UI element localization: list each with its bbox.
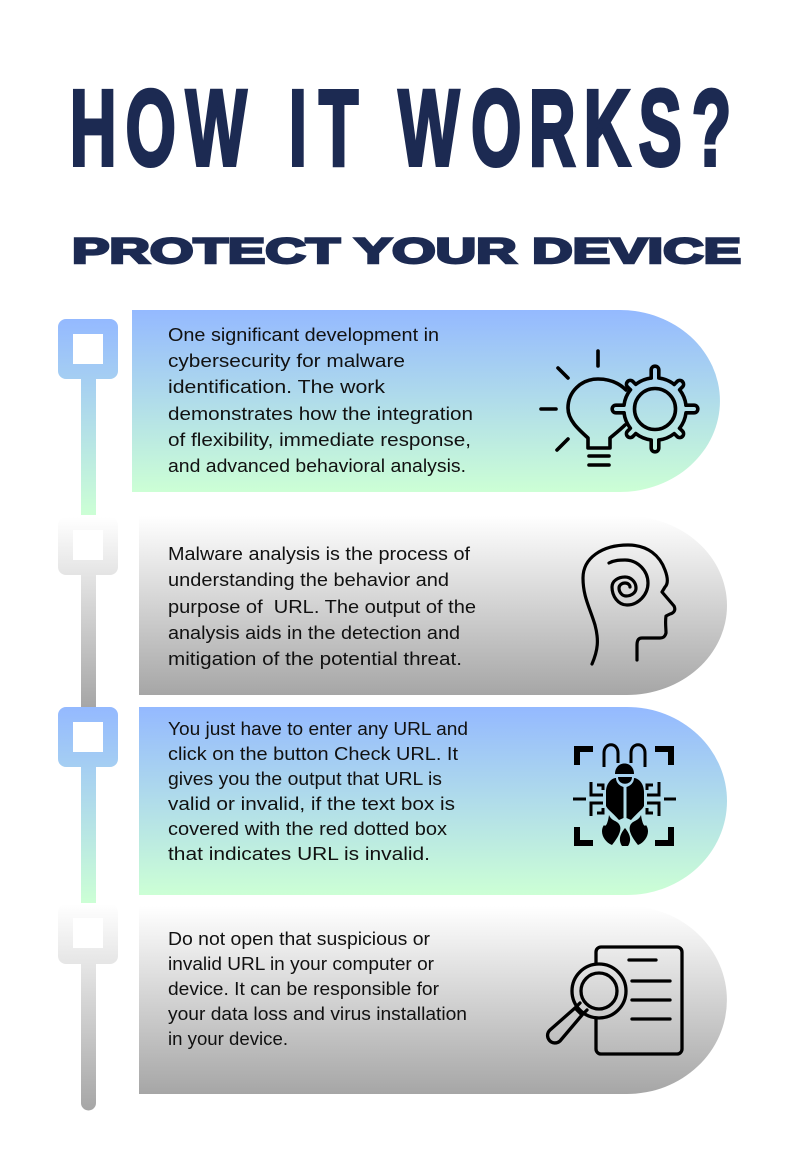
panel 3 text: click on the button Check URL. It bbox=[168, 743, 458, 764]
panel 1 text: and advanced behavioral analysis. bbox=[168, 455, 466, 476]
panel 3 text: You just have to enter any URL and bbox=[168, 718, 468, 739]
panel 3 text bbox=[168, 718, 468, 864]
panel 3 text: valid or invalid, if the text box is bbox=[168, 793, 455, 814]
panel 4 text: your data loss and virus installation bbox=[168, 1003, 467, 1024]
timeline marker 1 bbox=[58, 319, 118, 515]
panel 2 text: Malware analysis is the process of bbox=[168, 543, 471, 564]
subtitle: PROTECT YOUR DEVICE bbox=[72, 232, 741, 271]
panel 4 text: Do not open that suspicious or bbox=[168, 928, 430, 949]
panel 1 text bbox=[168, 324, 473, 476]
panel 2 text: purpose of URL. The output of the bbox=[168, 596, 476, 617]
timeline marker 2 bbox=[58, 517, 118, 707]
panel 4 text bbox=[168, 928, 467, 1049]
timeline marker 3 bbox=[58, 707, 118, 903]
icon: bug in scan frame bbox=[573, 745, 676, 846]
panel 4 text: device. It can be responsible for bbox=[168, 978, 439, 999]
panel 4 text: invalid URL in your computer or bbox=[168, 953, 434, 974]
panel 2 text: analysis aids in the detection and bbox=[168, 622, 460, 643]
title: HOW IT WORKS? bbox=[70, 68, 731, 188]
timeline marker 4 bbox=[58, 904, 118, 1111]
panel 3 text: that indicates URL is invalid. bbox=[168, 843, 430, 864]
panel 1 text: of flexibility, immediate response, bbox=[168, 429, 471, 450]
panel 3 bbox=[139, 707, 727, 895]
panel 4 bbox=[139, 906, 727, 1094]
panel 3 text: gives you the output that URL is bbox=[168, 768, 442, 789]
icon: document with magnifier bbox=[548, 947, 682, 1054]
panel 3 text: covered with the red dotted box bbox=[168, 818, 448, 839]
panel 2 text: understanding the behavior and bbox=[168, 569, 449, 590]
panel 4 text: in your device. bbox=[168, 1028, 288, 1049]
panel 1 text: demonstrates how the integration bbox=[168, 403, 473, 424]
panel 1 bbox=[132, 310, 720, 492]
panel 2 text bbox=[168, 543, 476, 669]
panel 1 text: cybersecurity for malware bbox=[168, 350, 405, 371]
icon: head with spiral bbox=[583, 545, 675, 664]
panel 2 bbox=[139, 516, 727, 695]
panel 1 text: identification. The work bbox=[168, 376, 386, 397]
panel 2 text: mitigation of the potential threat. bbox=[168, 648, 462, 669]
panel 1 text: One significant development in bbox=[168, 324, 439, 345]
icon: light bulb and gear bbox=[541, 351, 698, 465]
